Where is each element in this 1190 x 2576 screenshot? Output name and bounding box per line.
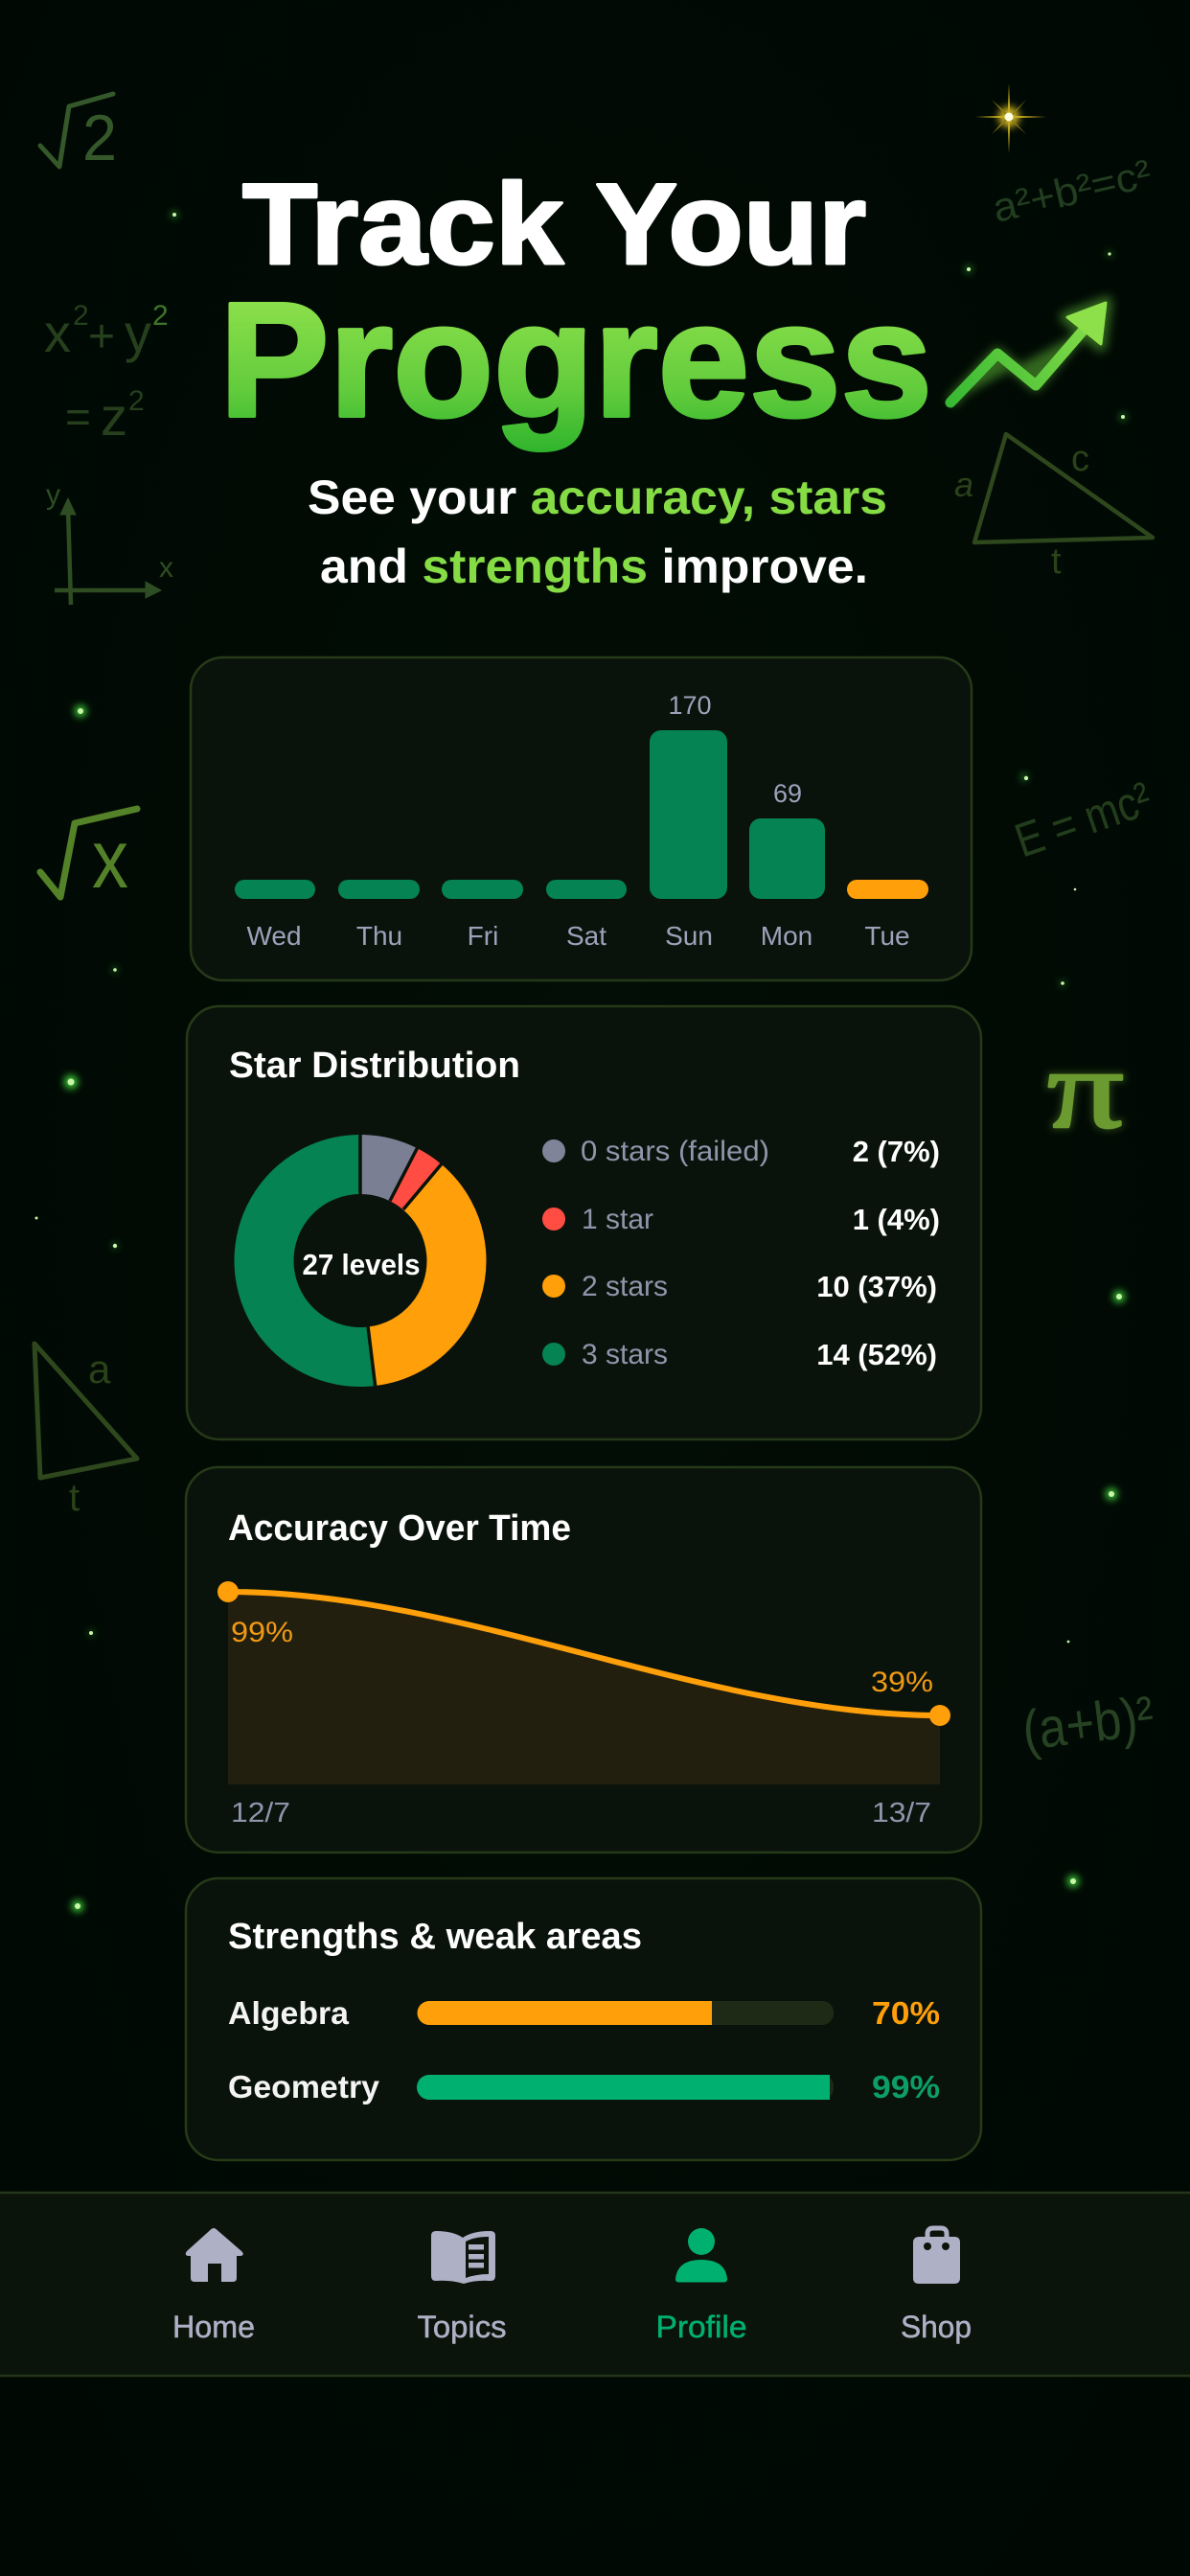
math decoration: triangle left: t [69, 1477, 80, 1519]
legend: 10 (37%) [816, 1270, 937, 1303]
math decoration: triangle top right: a [954, 465, 973, 504]
nav item: Profile (active) [655, 2228, 747, 2344]
math decoration: root 2: 2 [82, 102, 117, 174]
heading: Accuracy Over Time [228, 1508, 571, 1549]
legend: 2 (7%) [853, 1135, 940, 1168]
legend: 1 (4%) [853, 1203, 940, 1236]
math decoration: circle equation: 2 [73, 300, 89, 332]
day labels: Sun [665, 921, 713, 951]
icon: gold star sparkle [975, 83, 1046, 153]
day labels: Fri [468, 921, 498, 951]
panel: strengths and weak areas [186, 1878, 981, 2160]
math decoration: root 2 [40, 94, 117, 174]
donut centre label: 27 levels [303, 1248, 420, 1281]
day labels: Tue [864, 921, 910, 951]
math decoration: circle equation: 2 [152, 300, 169, 332]
bar values: 69 [773, 779, 802, 808]
subtitle line 1: See your accuracy, stars [308, 471, 887, 524]
day labels [246, 921, 910, 951]
nav item: Home [172, 2228, 255, 2344]
date labels: 13/7 [872, 1798, 931, 1828]
math decoration: triangle top right [954, 434, 1153, 582]
math decoration: circle equation [44, 300, 169, 447]
math decoration: circle equation: + [88, 311, 115, 362]
math decoration: axes [46, 479, 173, 605]
nav item: Topics [418, 2231, 506, 2344]
nav item: Home: Home [172, 2310, 255, 2344]
row: Algebra [228, 1995, 940, 2031]
legend: 0 stars (failed) [581, 1136, 769, 1167]
math decoration: energy formula: E = mc² [1008, 771, 1158, 867]
title line: Progress: Progress [219, 269, 932, 451]
math decoration: pi: π [1047, 1026, 1124, 1152]
sparkle dots [34, 211, 1127, 1912]
math decoration: binomial square: (a+b)² [1019, 1685, 1157, 1762]
math decoration: triangle top right: t [1051, 541, 1062, 582]
math decoration: triangle left: a [88, 1346, 111, 1392]
bar values [668, 691, 802, 808]
subtitle [308, 471, 887, 593]
math decoration: pi: π [1047, 1026, 1124, 1152]
legend: 2 stars [582, 1271, 668, 1302]
math decoration: circle equation: z [101, 386, 127, 447]
heading: Star Distribution [229, 1046, 520, 1086]
data labels: 99% [231, 1617, 293, 1648]
math decoration: triangle left [34, 1344, 137, 1519]
math decoration: axes: y [46, 479, 60, 511]
bars [235, 730, 928, 899]
row: Algebra: Algebra [228, 1995, 350, 2031]
nav item: Topics: Topics [418, 2310, 506, 2344]
math decoration: root x [40, 809, 137, 906]
bar values: 170 [668, 691, 712, 720]
row: Geometry [228, 2069, 940, 2104]
legend: 3 stars [582, 1339, 668, 1370]
nav item: Profile (active): Profile [655, 2310, 747, 2344]
donut chart [224, 1125, 496, 1396]
date labels: 12/7 [231, 1798, 290, 1828]
data labels [231, 1617, 933, 1698]
math decoration: axes: x [159, 552, 173, 584]
panel: accuracy over time [186, 1467, 981, 1852]
math decoration: triangle top right: c [1071, 439, 1089, 479]
bottom navigation bar [0, 2193, 1190, 2376]
heading: Strengths & weak areas [228, 1917, 642, 1957]
math decoration: circle equation: 2 [128, 385, 145, 417]
math decoration: pythagoras formula: a²+b²=c² [988, 150, 1156, 231]
math decoration: circle equation: x [44, 303, 71, 363]
row: Algebra: 70% [872, 1995, 940, 2031]
math decoration: circle equation: = [65, 392, 91, 442]
title [219, 160, 932, 451]
title line: Track Your: Track Your [242, 160, 866, 288]
day labels: Thu [356, 921, 402, 951]
math decoration: root x: x [92, 814, 128, 906]
nav item: Shop: Shop [901, 2310, 972, 2344]
day labels: Wed [246, 921, 302, 951]
panel: star distribution [187, 1006, 981, 1439]
math decoration: circle equation: y [125, 303, 151, 363]
row: Geometry: Geometry [228, 2069, 380, 2104]
subtitle line 2: and strengths improve. [320, 540, 868, 593]
legend [542, 1135, 940, 1371]
legend: 14 (52%) [816, 1338, 937, 1371]
data labels: 39% [871, 1667, 933, 1698]
nav item: Shop [901, 2228, 972, 2344]
day labels: Mon [761, 921, 812, 951]
day labels: Sat [566, 921, 606, 951]
row: Geometry: 99% [872, 2069, 940, 2104]
panel: weekly bar chart [191, 657, 972, 980]
legend: 1 star [582, 1204, 653, 1235]
date labels [231, 1798, 931, 1828]
icon: rising trend arrow [950, 302, 1107, 402]
line chart [217, 1581, 950, 1784]
